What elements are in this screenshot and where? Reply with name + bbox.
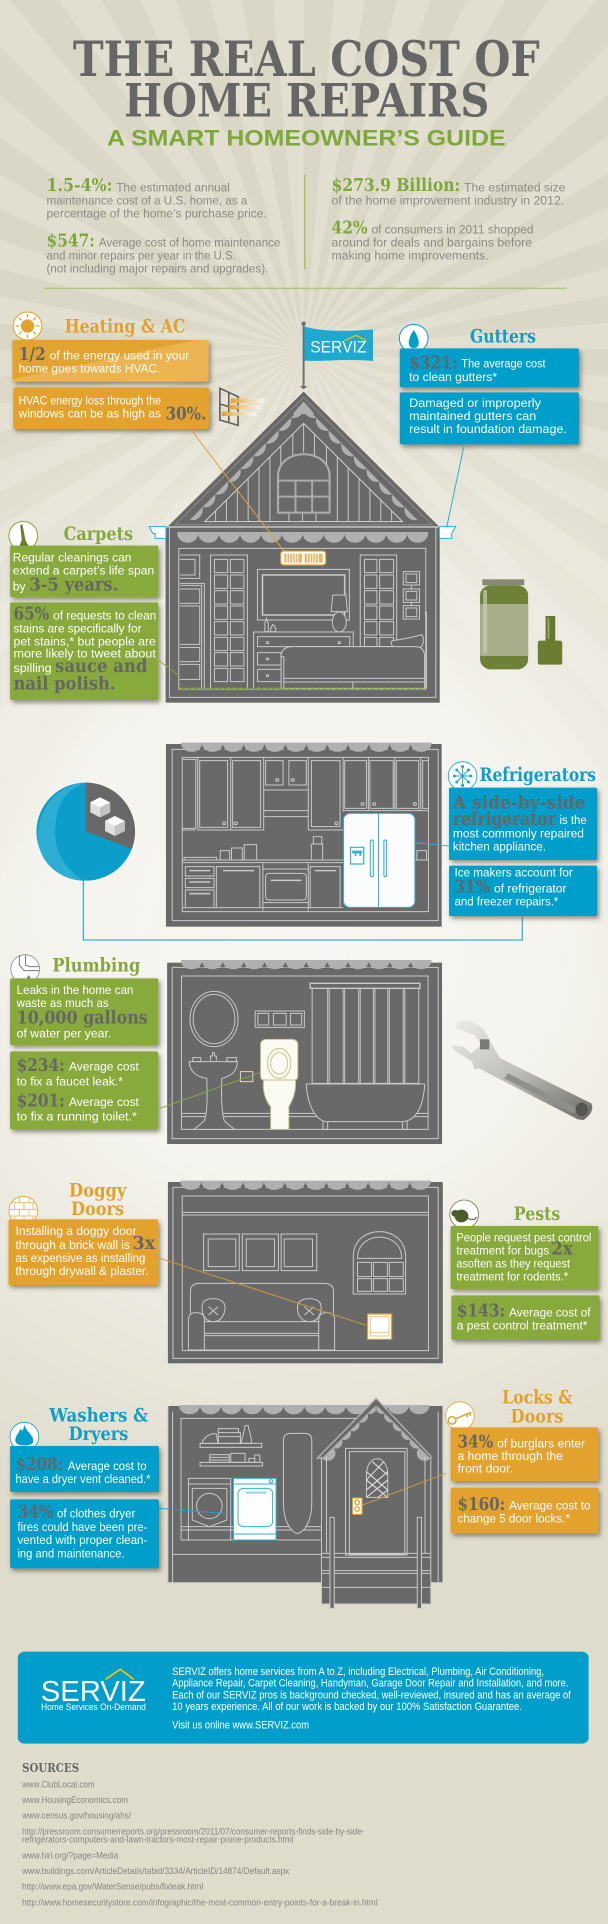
callout: ice makers: Ice makers account for [454,866,573,879]
icon: leaking pipe [11,955,40,983]
callout: half of energy: 1/2 [19,343,46,365]
living room illustration [168,1181,443,1363]
callout: cost to clean: to clean gutters* [409,370,497,384]
callout: stains: more likely to tweet about [14,647,156,660]
callout: treatment cost: Average cost of [509,1305,591,1319]
section: footer [18,1652,589,1908]
title [73,32,540,128]
callout: brick wall cost: through drywall & plaster. [16,1264,149,1278]
heading: Doors [71,1197,124,1220]
callout: treatment cost: a pest control treatment* [457,1318,587,1332]
stats: left column: The estimated annual [116,180,230,194]
callout: foundation damage: result in foundation damage. [409,422,567,436]
callout: bugs versus rodents [451,1226,598,1289]
callout: water waste: Leaks in the home can [17,983,133,997]
leader line [158,1258,368,1326]
callout: water waste [10,978,158,1045]
callout: stains: stains are specifically for [14,622,142,635]
callout: bugs versus rodents: asoften as they request [456,1257,570,1270]
leader line [191,430,284,552]
icon: vacuum [9,521,38,550]
stats: right column [332,174,565,262]
dryer [233,1478,276,1540]
callout: dryer fires: 34% [17,1501,54,1522]
callout: fix costs: Average cost [69,1060,139,1073]
callout: half of energy: of the energy used in your [50,349,190,362]
callout: burglars: front door. [458,1461,513,1475]
callout: vent cleaning: $208: [16,1453,63,1475]
logo: Home Services On-Demand [41,1703,146,1713]
panel: pests [450,1200,599,1340]
callout: stains: pet stains,* but people are [14,635,156,648]
callout: lock change cost: Average cost to [509,1499,591,1512]
leader line [415,843,450,846]
pie chart: ice makers 31% [36,783,135,881]
callout: fix costs: $234: [17,1054,65,1076]
hvac vent [281,551,326,565]
icon: sun [13,312,42,340]
callout: bugs versus rodents: treatment for bugs [456,1244,550,1257]
callout: dryer fires: of clothes dryer [57,1507,136,1520]
callout: dryer fires: vented with proper clean- [17,1533,147,1547]
callout: window energy loss: windows can be as high as [18,407,161,420]
panel: heating and AC [12,312,284,552]
about text [172,1665,571,1731]
icon: brick wall [9,1196,38,1225]
subtitle: A SMART HOMEOWNER’S GUIDE [107,126,506,151]
callout: stains: of requests to clean [53,608,156,622]
callout: burglars: a home through the [458,1449,563,1463]
sources list: www.hiri.org/?page=Media [21,1851,119,1861]
stats: right column: of the home improvement industry in 2012. [332,193,564,207]
callout: fix costs: Average cost [69,1095,139,1109]
callout: window energy loss: 30%. [166,403,206,424]
icon: window with escaping heat [220,388,264,425]
callout: brick wall cost: through a brick wall is [16,1238,130,1252]
shelves with linens [200,1426,263,1466]
panel: locks and doors [363,1386,598,1533]
callout: lock change cost: change 5 door locks.* [458,1511,570,1525]
callout: water waste: of water per year. [17,1027,111,1040]
refrigerator [344,813,415,907]
callout: stains: spilling [14,661,52,675]
panel: doggy doors [9,1179,368,1326]
stats: right column: 42% [332,217,368,238]
stats: right column: The estimated size [464,180,565,194]
callout: lock change cost: $160: [458,1493,505,1515]
callout: stains: nail polish. [14,673,116,694]
heading: Dryers [69,1422,128,1445]
icon: rodent [450,1200,478,1229]
stats: right column: around for deals and bargains before [332,236,532,249]
callout: treatment cost: $143: [457,1300,505,1321]
header section [44,32,567,288]
bathroom illustration [167,960,442,1144]
callout: window energy loss [13,387,209,429]
callout: half of energy [12,340,209,382]
callout: side by side [449,788,597,860]
section: kitchen house and refrigerators [10,743,597,1144]
callout: dryer fires [10,1499,159,1568]
title: HOME REPAIRS [124,73,489,128]
carpet strip [179,688,425,690]
callout: cost to clean: The average cost [461,357,546,370]
connector line [83,881,522,940]
callout: treatment cost [451,1295,599,1340]
icon: wrench [452,1021,592,1120]
leader line [447,445,464,527]
callout: side by side: most commonly repaired [453,827,584,840]
sources list: refrigerators-computers-and-lawn-tractors-most-repair-prone-products.html [22,1835,294,1845]
callout: stains: 65% [14,603,50,624]
icon: nail polish [538,616,562,665]
panel: plumbing [10,954,260,1129]
callout: burglars: 34% [458,1431,494,1452]
kitchen illustration [166,743,442,927]
callout: life span: Regular cleanings can [13,551,131,564]
stats: right column: $273.9 Billion: [332,174,460,196]
sources list: www.ClubLocal.com [21,1780,95,1790]
callout: ice makers: 31% [454,876,490,897]
stats: left column: and minor repairs per year in the U.S. [47,249,236,262]
stats: right column: of consumers in 2011 shopped [371,223,534,236]
callout: fix costs: to fix a faucet leak.* [17,1074,123,1088]
section: living room, doggy doors and pests [9,1179,599,1608]
callout: bugs versus rodents: treatment for rodents.* [456,1270,568,1283]
callout: vent cleaning [10,1446,159,1492]
stats: left column: $547: [47,230,95,251]
callout: cost to clean [400,348,579,387]
heading: Heating & AC [65,315,185,337]
callout: ice makers: and freezer repairs.* [454,895,558,908]
callout: side by side: refrigerator [453,808,556,830]
callout: half of energy: home goes towards HVAC. [19,362,160,375]
callout: window energy loss: HVAC energy loss through the [19,394,161,407]
toilet [261,1039,298,1129]
callout: fix costs: to fix a running toilet.* [17,1110,137,1123]
about text: Visit us online www.SERVIZ.com [172,1718,309,1731]
icon: water drop [399,324,428,352]
front porch and door [317,1398,431,1608]
callout: brick wall cost: as expensive as installing [16,1251,145,1265]
leader line [159,1508,233,1514]
stats: left column: maintenance cost of a U.S. home, as a [47,193,248,207]
sources list: www.buildings.com/ArticleDetails/tabid/3334/ArticleID/14874/Default.aspx [21,1867,289,1877]
icon: snowflake [448,762,477,790]
callout: stains [10,602,158,700]
callout: life span [10,546,158,597]
panel: about SERVIZ [18,1652,589,1744]
callout: cost to clean: $321: [409,352,458,373]
leader line [159,1073,260,1109]
icon: sauce jar [480,579,528,669]
heading [502,1386,572,1427]
flag [300,321,373,389]
sources list: http://www.epa.gov/WaterSense/pubs/fixleak.html [22,1882,203,1892]
stats: left column: (not including major repairs and upgrades). [47,261,268,275]
callout: foundation damage [400,392,579,444]
callout: foundation damage: Damaged or improperly [409,396,541,410]
callout: fix costs [10,1051,158,1129]
heading: Doggy [69,1179,127,1201]
stats: right column: making home improvements. [332,249,489,262]
callout: vent cleaning: Average cost to [68,1459,147,1473]
sources list: www.HousingEconomics.com [21,1796,128,1806]
heading: Pests [514,1202,560,1225]
callout: life span: 3-5 years. [29,574,118,595]
callout: brick wall cost: 3x [133,1232,155,1254]
callout: life span: extend a carpet’s life span [13,564,154,577]
heading [48,1404,148,1445]
heading: Gutters [470,325,536,347]
panel: carpets [9,521,180,700]
panel: refrigerators [415,762,597,916]
heading: Locks & [502,1386,572,1408]
heading: Doors [511,1405,563,1427]
heading [69,1179,127,1220]
callout: dryer fires: ing and maintenance. [17,1546,124,1560]
ironing board [283,1433,312,1533]
icon: key [446,1402,474,1430]
doggy door [368,1314,392,1339]
heading: Plumbing [52,954,140,976]
callout: fix costs: $201: [17,1090,65,1111]
door lock [352,1498,362,1514]
callout: side by side: is the [560,813,587,827]
sources list: http://www.homesecuritystore.com/infographic/the-most-common-entry-points-for-a-break-in.html [22,1898,378,1908]
callout: vent cleaning: have a dryer vent cleaned.* [16,1472,150,1486]
stats: left column [47,174,280,275]
callout: foundation damage: maintained gutters can [409,409,536,423]
callout: ice makers: of refrigerator [494,882,567,895]
callout: side by side: kitchen appliance. [453,840,546,853]
callout: burglars [451,1427,598,1481]
section: first house (heating, gutters, carpets) [9,312,579,703]
stats: left column: Average cost of home maintenance [99,236,280,249]
leader line [363,1473,446,1505]
icon: flame [10,1422,39,1451]
heading: Carpets [64,522,133,545]
callout: water waste: 10,000 gallons [17,1007,148,1028]
callout: brick wall cost [9,1219,158,1285]
icon: ice cubes [90,797,125,836]
callout: burglars: of burglars enter [497,1437,586,1450]
logo [41,1669,146,1713]
sources heading: SOURCES [22,1762,79,1776]
sources list [21,1780,378,1908]
callout: ice makers [449,866,597,916]
callout: life span: by [13,579,26,593]
flag: SERVIZ [310,338,366,356]
logo: SERVIZ [41,1675,146,1707]
callout: brick wall cost: Installing a doggy door [16,1224,137,1238]
callout: dryer fires: fires could have been pre- [17,1520,147,1534]
callout: bugs versus rodents: 2x [551,1238,573,1259]
heading: Washers & [48,1404,148,1426]
house illustration [149,391,456,703]
gutters [149,527,456,538]
panel: washers and dryers [10,1404,233,1568]
callout: water waste: waste as much as [16,996,109,1010]
callout: lock change cost [451,1488,598,1533]
leader line [158,660,180,677]
washer [188,1478,231,1540]
sources list: http://pressroom.consumerreports.org/pressroom/2011/07/consumer-reports-finds-side-by-side- [22,1827,364,1837]
sources list: www.census.gov/housing/ahs/ [21,1811,131,1821]
callout: stains: sauce and [55,655,148,677]
stats: left column: 1.5-4%: [47,174,112,196]
stats: left column: percentage of the home’s purchase price. [47,206,267,220]
panel: gutters [399,324,579,527]
laundry and front door illustration [168,1398,443,1608]
